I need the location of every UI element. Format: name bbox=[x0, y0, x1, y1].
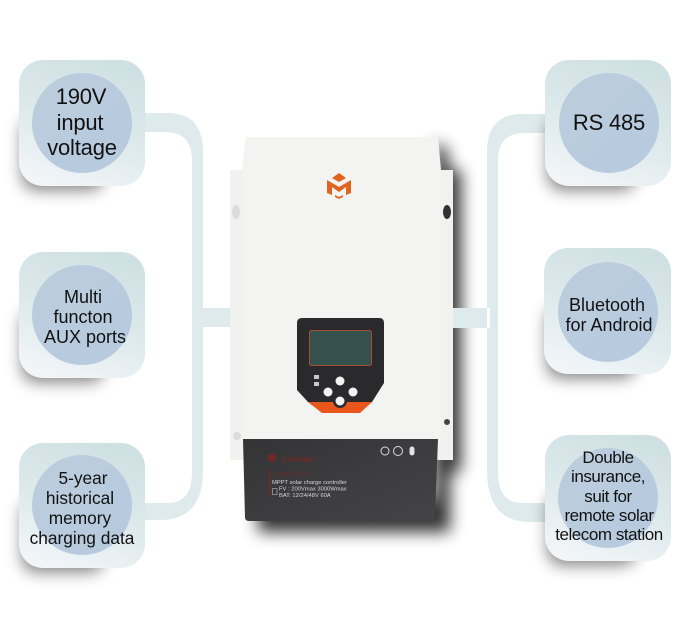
brand text: Lumiax bbox=[282, 454, 314, 464]
card: 5-year historical memory charging data: 5-year bbox=[59, 468, 108, 488]
card: multi function AUX ports: functon bbox=[53, 307, 113, 327]
card: double insurance: insurance, bbox=[571, 467, 645, 486]
card: 190V input voltage: input bbox=[57, 110, 103, 135]
card: multi function AUX ports: AUX ports bbox=[44, 327, 126, 347]
card: Bluetooth for Android: Bluetooth bbox=[569, 295, 645, 315]
red bar bbox=[269, 470, 270, 497]
card: 190V input voltage bbox=[19, 60, 145, 190]
card: double insurance: suit for bbox=[584, 487, 632, 506]
card: 190V input voltage: voltage bbox=[47, 135, 117, 160]
logo bbox=[327, 173, 351, 199]
card: 5-year historical memory charging data: historical bbox=[46, 488, 114, 508]
spec text: MPPT solar charge controller bbox=[272, 480, 347, 486]
card: double insurance: remote solar bbox=[564, 506, 654, 525]
card: RS 485 bbox=[545, 60, 671, 190]
card: multi function AUX ports bbox=[19, 252, 145, 382]
model text: Model: MPPT bbox=[274, 472, 311, 478]
buttons bbox=[324, 376, 358, 406]
orange base bbox=[308, 402, 372, 413]
certification icons bbox=[381, 446, 414, 456]
status indicators bbox=[314, 375, 319, 386]
brand logo bbox=[268, 454, 276, 462]
card: double insurance: telecom station bbox=[555, 525, 663, 544]
left connector bbox=[145, 113, 244, 520]
card: multi function AUX ports: Multi bbox=[64, 287, 102, 307]
control panel bbox=[297, 318, 384, 413]
device shadow bbox=[258, 142, 461, 532]
card: 190V input voltage: 190V bbox=[56, 84, 107, 109]
checkbox mark bbox=[272, 488, 277, 494]
right connector bbox=[450, 114, 545, 522]
LCD screen bbox=[310, 330, 372, 366]
spec text: FV : 200Vmax 3000Wmax bbox=[279, 486, 347, 492]
card: RS 485: RS 485 bbox=[573, 110, 645, 135]
mounting flange bbox=[230, 170, 453, 460]
button halos bbox=[321, 374, 360, 408]
card: Bluetooth for Android bbox=[544, 248, 671, 378]
card: 5-year historical memory charging data: memory bbox=[49, 508, 112, 528]
card: double insurance bbox=[545, 435, 671, 565]
solar charge controller device bbox=[230, 137, 453, 521]
black lower cover bbox=[243, 439, 438, 521]
card: 5-year historical memory charging data bbox=[19, 443, 145, 572]
card: Bluetooth for Android: for Android bbox=[565, 315, 653, 335]
card: double insurance: Double bbox=[582, 448, 634, 467]
white housing bbox=[242, 137, 441, 442]
connector lines bbox=[145, 113, 545, 522]
spec text: BAT: 12/24/48V 60A bbox=[279, 493, 331, 499]
card: 5-year historical memory charging data: charging data bbox=[30, 528, 135, 548]
flange keyholes bbox=[232, 205, 451, 440]
